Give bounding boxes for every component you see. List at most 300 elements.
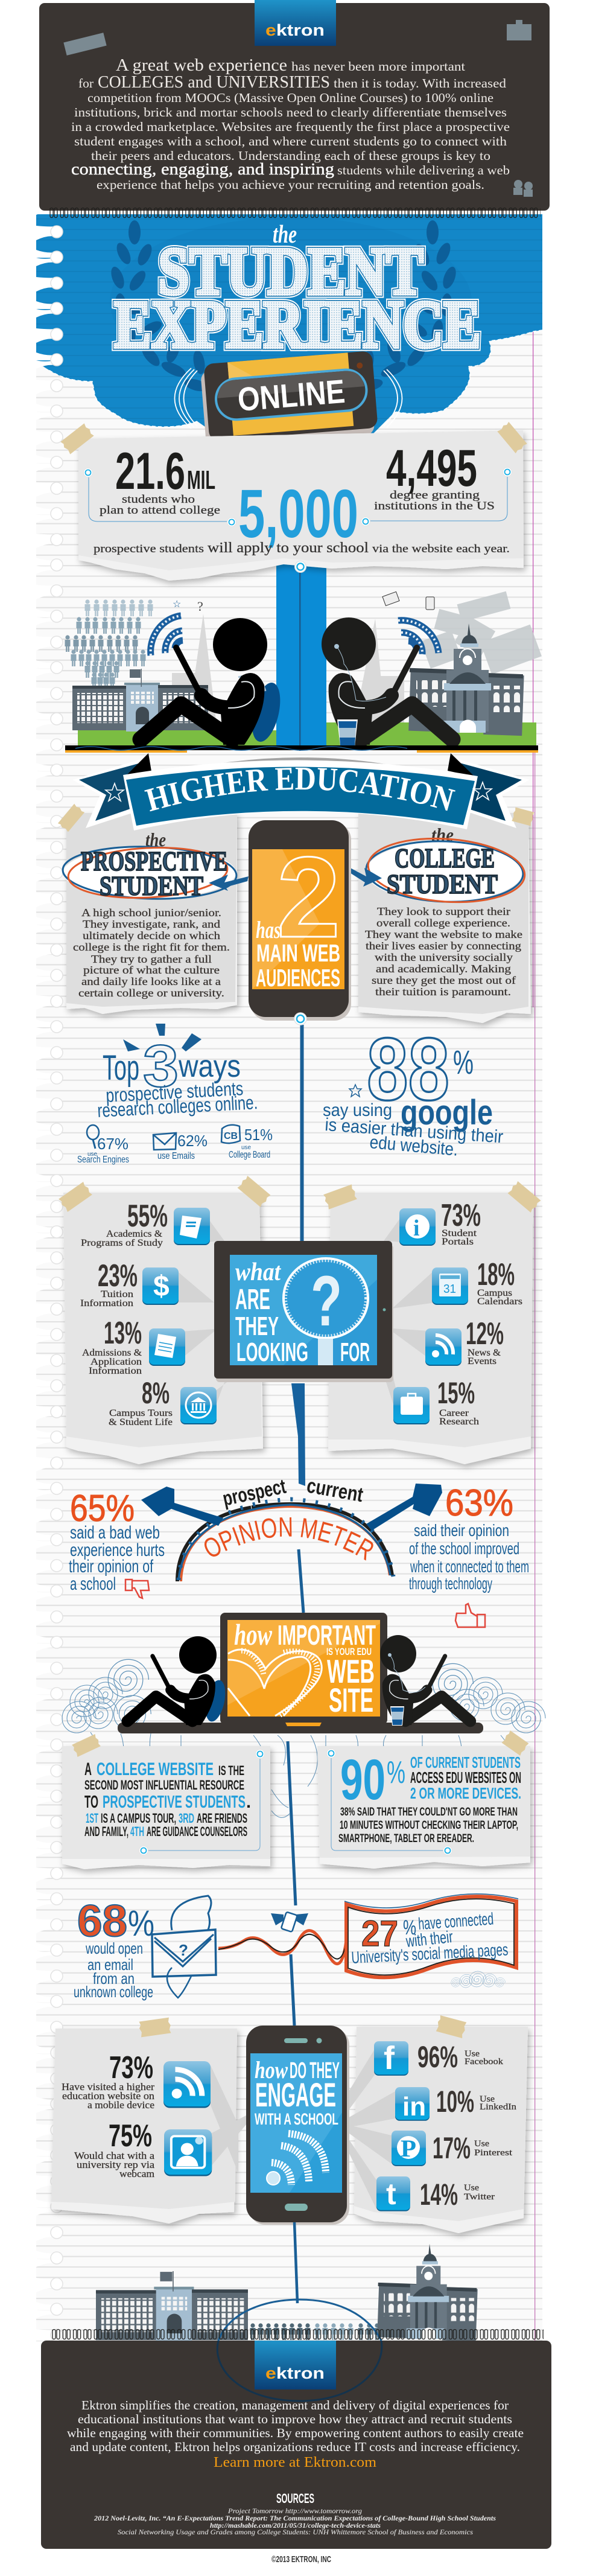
twitter: Twitter [464,2192,495,2202]
top 3 ways doodle: research colleges online. [97,1091,258,1121]
college board stat [221,1125,273,1160]
engage stat: 75% webcam: 75% [109,2119,152,2154]
stat 13% admissions: 13% [104,1316,142,1351]
stat 13% admissions: Information [89,1366,142,1376]
fact: college website: SECOND MOST INFLUENTIAL RESOURCE [84,1777,244,1793]
timeline line 2 [291,1383,305,1486]
facebook [374,2040,504,2076]
stat 13% admissions: Application [90,1357,142,1367]
top 3 ways doodle: prospective students [105,1077,244,1106]
stat: 68% open email: an email [87,1956,133,1974]
closing copy: while engaging with their communities. By empowering content authors to easily create [67,2426,524,2440]
stat 8% campus tours [109,1376,217,1427]
icon: thumbs up [455,1604,485,1627]
intro copy: A great web experience [116,56,287,75]
fact: college website: IS A CAMPUS TOUR, [101,1811,176,1826]
engage stat: 75% webcam [74,2119,212,2179]
linkedin: Use [480,2094,495,2104]
torn left edge with binder holes [36,206,64,2341]
doodle cloud [451,1971,506,1988]
phone: two main web audiences: has [256,916,281,943]
online device [200,351,378,448]
intro copy: students while delivering a web [337,163,510,177]
stat 55% academics: 55% [127,1199,168,1234]
intro copy: for [78,76,94,91]
laptop [118,1613,483,1733]
stat 23% tuition: Tuition [101,1289,133,1299]
top spiral binding [48,207,541,219]
emails stat: use Emails [157,1151,195,1161]
stat: 65% bad web experience: 65% [70,1488,135,1529]
fact: college website: PROSPECTIVE STUDENTS [103,1793,246,1812]
audience: prospective student heading: the [145,829,166,850]
tablet: what are they looking for: LOOKING [236,1337,308,1367]
bottom left school [96,2271,248,2341]
white rings around device [175,368,402,429]
search engines stat [77,1125,129,1165]
title: student experience: STUDENT [158,234,423,309]
search engines stat: use [87,1151,97,1158]
right looking-for stats [393,1198,522,1427]
bottom dark panel [41,2300,551,2549]
stat 55% academics: Programs of Study [81,1238,163,1248]
tablet: what are they looking for: THEY [235,1312,279,1341]
text: college student description: They want the website to make [365,928,522,940]
phone: how do they engage: WITH A SCHOOL [255,2110,338,2128]
panels: college website facts [62,1746,530,1869]
wifi signal arcs right [398,620,439,654]
text: college student description: They look to support their [377,905,510,917]
stat 15% career: Career [439,1408,469,1418]
linkedin: 10% [436,2085,474,2119]
fact: college website: 3RD [179,1811,194,1826]
facebook: f [384,2040,395,2076]
twitter: Use [464,2183,479,2193]
text: prospective student description [73,907,230,999]
intro copy: experience that helps you achieve your recruiting and retention goals. [97,177,484,192]
text: prospective student description: and daily life looks like at a [81,975,221,987]
timeline line 4 [288,1741,296,1905]
stat: 65% bad web experience: a school [70,1574,116,1594]
fact: college website: ARE FRIENDS [197,1811,247,1826]
linkedin: LinkedIn [480,2102,517,2112]
bottom crowd [250,2323,380,2340]
88% doodle: edu website. [369,1132,459,1160]
pinterest [392,2131,513,2166]
meter labels: prospect [221,1475,288,1511]
intro copy: COLLEGES and UNIVERSITIES [98,73,330,92]
sources list: Project Tomorrow http://www.tomorrow.org [227,2507,362,2515]
stat 15% career: 15% [437,1376,475,1410]
stat: 63% improved opinion: of the school improved [409,1539,519,1558]
stat 55% academics [81,1199,210,1248]
fact: 90% of current students: 90 [340,1748,385,1812]
text: college student description: and academically. Making [376,963,511,975]
arrow to 63% [366,1484,442,1531]
corner icons [63,20,533,197]
88% doodle [323,1020,504,1160]
pinterest: P [401,2135,416,2162]
text: prospective student description: They try to gather a full [91,953,212,965]
tape pieces on stats panel [60,421,527,454]
stat: 21.6 million [100,442,220,517]
stat caption: via the website each year. [372,543,510,555]
logo tab: ektron [265,21,325,39]
stat: 5,000: 5,000 [238,476,358,552]
stat 12% news: 12% [466,1316,504,1351]
text: college student description: their lives easier by connecting [366,940,521,952]
banner: higher education [79,753,522,831]
connector: 90% fact [327,1749,452,1855]
stat: 27% social media flag [344,1894,518,1977]
laptop: how [234,1618,272,1651]
fact: college website: 1ST [86,1811,98,1826]
closing copy: and update content, Ektron helps organizations reduce IT costs and increase efficiency. [70,2440,520,2454]
intro copy: connecting, engaging, and inspiring [71,160,334,178]
stat: 68% open email: % [128,1903,154,1943]
icon: winged envelope [152,1896,216,1998]
linkedin: in [402,2092,426,2122]
stat: 65% bad web experience: their opinion of [69,1557,153,1577]
college board stat: CB [224,1131,238,1141]
laurel wreath [109,220,458,394]
title: student experience: EXPERIENCE [114,287,481,362]
laptop: WEB [327,1653,375,1690]
stat 23% tuition: $ [153,1270,170,1302]
tablet: what are they looking for [214,1241,393,1382]
panels: what are they looking for [63,1193,533,1464]
scene: skyline silhouettes [172,614,404,730]
laptop: IMPORTANT [278,1619,376,1651]
section panels: audiences [66,813,531,1023]
logo tab [255,0,336,46]
stat: 65% bad web experience: said a bad web [70,1523,160,1543]
stat caption: prospective students [94,543,204,555]
88% doodle: 88 [367,1020,449,1119]
top 3 ways doodle: ways [178,1049,241,1084]
intro copy: then it is today. With increased [334,76,507,91]
stat: 68% open email: from an [93,1969,135,1988]
text: prospective student description: A high school junior/senior. [81,907,221,919]
laptop: SITE [329,1681,373,1719]
squiggle link [218,1931,346,1964]
fact: college website: A [84,1759,92,1779]
stat: 63% improved opinion: said their opinion [414,1521,509,1540]
closing copy: Ektron simplifies the creation, management and delivery of digital experiences for [81,2398,509,2412]
fact: college website: ARE GUIDANCE COUNSELORS [147,1824,247,1839]
stat 73% portals: Student [442,1228,477,1239]
laptop scene [118,1613,483,1733]
floating doodle icons [173,591,434,614]
stat caption [94,540,510,556]
connector: college website [139,1749,264,1855]
sources list: Social Networking Usage and Grades among College Students: UNH Whittemore School of Business and Economics [118,2528,473,2536]
stat 23% tuition: Information [80,1298,133,1309]
88% doodle: google [401,1093,493,1132]
text: prospective student description: certain college or university. [78,987,224,999]
pinterest: 17% [433,2131,471,2165]
intro copy: student engages with a school, and where current students go to connect with [74,134,507,148]
tape pieces on fact panels [71,1730,529,1757]
twitter [376,2176,495,2211]
notebook paper [36,214,542,2342]
intro copy: in a crowded marketplace. Websites are frequently the first place a prospective [71,120,510,134]
panels: how do they engage [51,2027,528,2233]
college board stat: 51% [244,1126,273,1144]
fact: college website: 4TH [130,1824,144,1839]
sources list [94,2507,496,2536]
phone: how do they engage: ENGAGE [255,2076,336,2114]
student left [127,1636,229,1725]
floating doodle icons: ☆ [173,599,181,610]
icon: rss [163,2061,211,2108]
banner stars [106,782,492,801]
fact: 90% of current students: 2 OR MORE DEVICES. [410,1784,521,1802]
stat: 4,495: degree granting [390,489,480,502]
audience: college student heading [365,824,527,907]
audience: prospective student heading: STUDENT [100,871,203,901]
engage stat: 73% mobile device: 73% [109,2050,153,2085]
88% doodle: say using [323,1100,392,1120]
stat: 63% improved opinion: through technology [409,1574,492,1593]
twitter: 14% [420,2178,458,2211]
title: student experience: STUDENT [158,234,423,309]
fact: college website: AND FAMILY, [84,1824,128,1839]
intro copy: their peers and educators. Understanding each of these groups is key to [91,148,490,163]
logo tab: ektron [265,2364,325,2382]
stat 18% calendars: 31 [443,1283,456,1296]
banner: higher education: HIGHER EDUCATION [144,768,455,811]
bottom right school [377,2244,478,2342]
tablet: what are they looking for: what [235,1258,281,1286]
tape pieces on looking-for panels [58,1175,541,1213]
doodle spirals [62,1659,545,1817]
pinterest: Use [474,2139,489,2149]
closing copy [67,2398,524,2454]
title: student experience: EXPERIENCE [114,287,481,362]
fact: college website [84,1759,251,1839]
timeline line 3 [299,1549,303,1613]
audience: college student heading: STUDENT [387,869,498,899]
arrows from phone to headings [209,867,382,891]
rays above the 3 [123,1024,201,1051]
timeline line 5 [291,1954,294,2026]
intro copy: institutions, brick and mortar schools need to clearly differentiate themselves [74,105,507,120]
left looking-for stats [80,1199,217,1427]
facebook: 96% [417,2040,458,2074]
emails stat: 62% [177,1132,208,1150]
icon: flying phone [271,1912,308,1932]
audience: prospective student heading [62,829,237,902]
opinion meter: current [305,1474,365,1506]
scene: ground [78,722,536,745]
online pill: ONLINE [236,372,346,418]
engage stat: 73% mobile device: Have visited a higher [62,2081,155,2093]
logo tab [255,2341,336,2389]
stat: 21.6 million: plan to attend college [100,504,220,517]
stat 15% career [393,1376,479,1427]
student with backpack [141,618,285,745]
text: college student description: sure they get the most out of [372,974,516,986]
stat: 4,495: institutions in the US [374,500,495,512]
text: prospective student description: They investigate, rank, and [83,918,220,930]
stat 18% calendars: Campus [477,1288,512,1298]
fact: college website: . [246,1793,251,1812]
call to action: Learn more at Ektron.com [214,2455,376,2470]
bottom spiral binding [51,2329,544,2341]
social stats [374,2040,517,2211]
arrow to 65% [141,1487,223,1526]
stat 18% calendars [432,1257,522,1307]
college board stat: use [241,1144,251,1151]
crowd of people [65,599,153,689]
stat 55% academics: Academics & [106,1229,163,1239]
audience: college student heading: the [431,824,454,846]
title: the: the [273,221,297,249]
top 3 ways doodle: 3 [143,1033,179,1099]
stat 18% calendars: Calendars [477,1296,522,1307]
icon: magnifying glass: ? [311,1261,342,1341]
title: student experience: STUDENT [158,234,423,309]
stat 23% tuition [80,1258,179,1309]
facebook: Facebook [465,2057,504,2067]
stat 8% campus tours: 8% [142,1376,170,1410]
stat caption: will apply to your school [208,540,369,556]
text: college student description: overall college experience. [376,917,510,929]
left school building [72,669,208,732]
stat: 65% bad web experience: experience hurts [70,1540,165,1560]
blue column [276,564,326,751]
stat 73% portals [399,1198,481,1247]
facebook: Use [465,2049,480,2059]
stat 12% news: News & [468,1348,501,1358]
icon: thumbs down [125,1580,149,1598]
phone: how do they engage: how [255,2056,288,2083]
icon: hand-drawn signal [267,2134,326,2185]
fact: college website: IS THE [218,1763,244,1778]
blue header shape [36,214,542,457]
stat: 65% bad web experience [69,1488,165,1598]
stat: 68% open email: 68 [77,1896,127,1946]
fact: 90% of current students [338,1748,521,1845]
college board stat: College Board [229,1150,270,1160]
stat 18% calendars: 18% [477,1257,515,1292]
audience: college student heading: COLLEGE [395,843,495,873]
student with earbuds [322,617,452,745]
text: college student description: with the university socially [375,951,513,963]
stat 73% portals: Portals [442,1237,474,1247]
fact: 90% of current students: SMARTPHONE, TABLET OR EREADER. [338,1832,474,1845]
text: college student description: their tuition is paramount. [375,986,511,998]
stat: 27% social media flag: have connected [417,1909,494,1933]
column connector node [295,561,306,572]
sources heading: SOURCES [276,2491,314,2506]
stat 73% portals: i [413,1216,420,1241]
stats panel [78,430,524,581]
icon: heart [228,1650,322,1716]
banner tails [72,753,530,828]
stat 15% career: Research [439,1417,479,1427]
tape pieces on engage panels [138,2015,467,2038]
top 3 ways doodle: Top [103,1048,139,1088]
intro copy: has never been more important [291,59,465,74]
right school building [408,623,524,736]
tablet: what are they looking for: ARE [235,1284,270,1316]
closing copy: educational institutions that want to improve how they attract and recruit students [78,2412,512,2426]
coffee cup [337,719,358,747]
stat: 4,495 [374,439,495,512]
88% doodle: % [453,1043,474,1081]
phone: how do they engage [246,2026,349,2225]
stat 8% campus tours: Campus Tours [109,1408,173,1418]
text: college student description [365,905,522,998]
phone: two main web audiences: AUDIENCES [256,964,340,992]
stat: 27% social media flag: with their [405,1927,454,1951]
phone: two main web audiences: MAIN WEB [256,939,340,967]
twitter: t [386,2177,396,2211]
stat: 21.6 million: MIL [187,465,215,495]
top dark panel [39,0,550,211]
fact: college website: TO [84,1793,98,1812]
text: prospective student description: picture of what the culture [83,964,220,976]
phone: how do they engage: DO THEY [290,2058,340,2083]
tablet: what are they looking for: FOR [340,1337,370,1367]
pinterest: Pinterest [474,2148,513,2158]
rays from social icons to phone [211,2047,395,2209]
sources list: http://mashable.com/2011/05/31/college-tech-device-stats [210,2521,381,2530]
top 3 ways doodle [77,1024,273,1165]
search engines stat: Search Engines [77,1155,129,1165]
meter arcs [177,1499,393,1581]
stat 73% portals: 73% [441,1198,481,1233]
timeline line 6 [294,2222,297,2303]
opinion meter: OPINION METER [204,1517,373,1561]
wifi signal arcs left [151,616,183,655]
scene floor bar [65,745,538,753]
engage stat: 73% mobile device: a mobile device [87,2099,154,2111]
stat: 27% social media flag: % [403,1916,416,1939]
stat: 63% improved opinion: 63% [445,1482,513,1524]
icon: webcam [164,2129,212,2176]
stat 8% campus tours: & Student Life [109,1417,173,1427]
stat 12% news [425,1316,504,1366]
intro copy [71,56,510,192]
floating doodle icons: ? [197,599,203,614]
stat: 27% social media flag: 27 [361,1913,398,1954]
stat 13% admissions [82,1316,185,1376]
stat 23% tuition: 23% [98,1258,138,1293]
circle around logo [217,2300,382,2401]
text: prospective student description: ultimately decide on which [83,929,220,942]
tape pieces on audience panels [57,803,534,832]
student right [380,1635,471,1726]
stat 12% news: Events [468,1356,496,1366]
engage stat: 75% webcam: Would chat with a [74,2150,155,2161]
88% doodle: is easier than using their [325,1115,504,1147]
stat: 21.6 million: students who [122,493,195,506]
engage stat: 73% mobile device: education website on [62,2090,154,2102]
intro copy: competition from MOOCs (Massive Open Online Courses) to 100% online [87,91,493,105]
engage stat: 73% mobile device [62,2050,211,2111]
linkedin [395,2085,517,2122]
tilted gray buildings collage [420,591,542,674]
connector lines [89,472,507,521]
icon: magnifying glass [284,1258,368,1365]
phone: two main web audiences [249,820,351,1021]
stat 13% admissions: Admissions & [82,1348,142,1358]
banner arch shadow [151,757,448,785]
stat: 68% open email [74,1896,154,2001]
